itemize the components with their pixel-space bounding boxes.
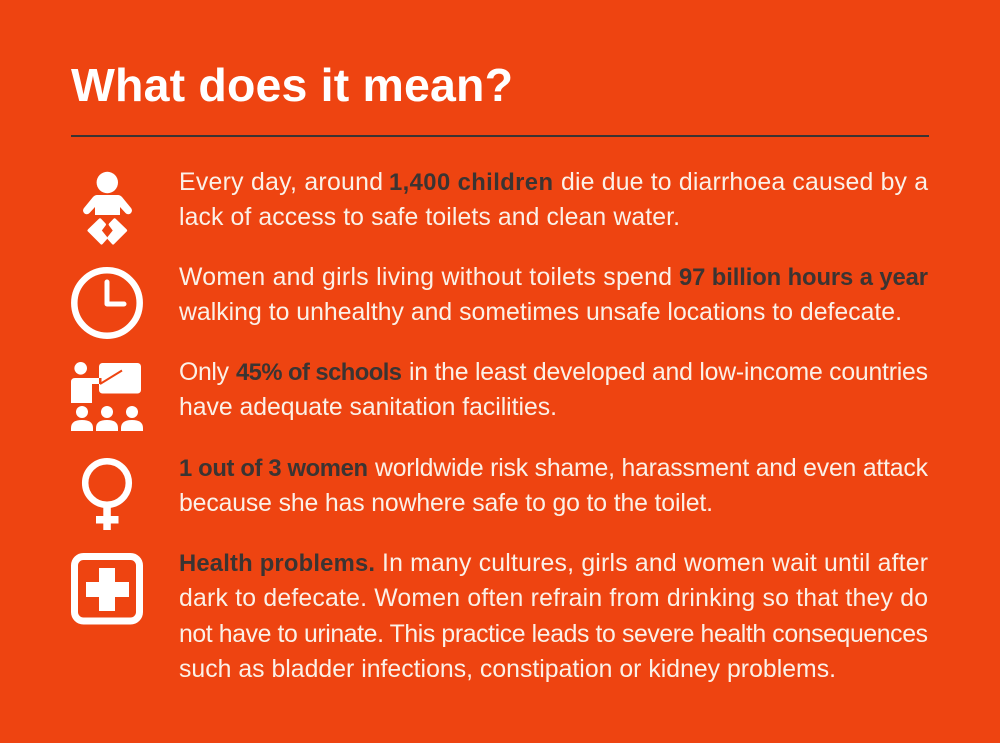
text: schools: have adequate sanitation facilities. (179, 394, 557, 421)
text: children (179, 169, 928, 231)
text: schools: 45% of schools (236, 359, 402, 386)
text: children: Every day, around (179, 169, 383, 196)
icon: female symbol (85, 461, 129, 530)
text: hours: Women and girls living without toilets spend (179, 264, 672, 291)
text: hours: walking to unhealthy and sometimes unsafe locations to defecate. (178, 299, 902, 326)
icon: classroom (71, 362, 143, 431)
text: women: worldwide risk shame, harassment and even attack (374, 455, 929, 482)
text: women (179, 455, 929, 517)
text: health: not have to urinate. This practice leads to severe health consequences (179, 621, 928, 648)
text: children: die due to diarrhoea caused by a (561, 169, 928, 196)
text: schools (179, 359, 928, 421)
text: women: because she has nowhere safe to go to the toilet. (179, 490, 713, 517)
text: health: such as bladder infections, constipation or kidney problems. (179, 656, 836, 683)
title: What does it mean? (71, 59, 513, 111)
text: hours: 97 billion hours a year (679, 264, 928, 291)
text: children: 1,400 children (389, 169, 553, 196)
icon: baby (83, 172, 132, 243)
icon: clock (74, 270, 140, 336)
text: health: dark to defecate. Women often refrain from drinking so that they do (179, 585, 928, 612)
text: health: In many cultures, girls and women wait until after (382, 550, 928, 577)
text: health (179, 550, 928, 683)
text: schools: in the least developed and low-income countries (409, 359, 928, 386)
text: hours (178, 264, 928, 326)
icon: medical cross (74, 556, 140, 621)
text: health: Health problems. (179, 550, 375, 577)
text: women: 1 out of 3 women (179, 455, 368, 482)
text: children: lack of access to safe toilets and clean water. (179, 204, 680, 231)
text: schools: Only (179, 359, 230, 386)
